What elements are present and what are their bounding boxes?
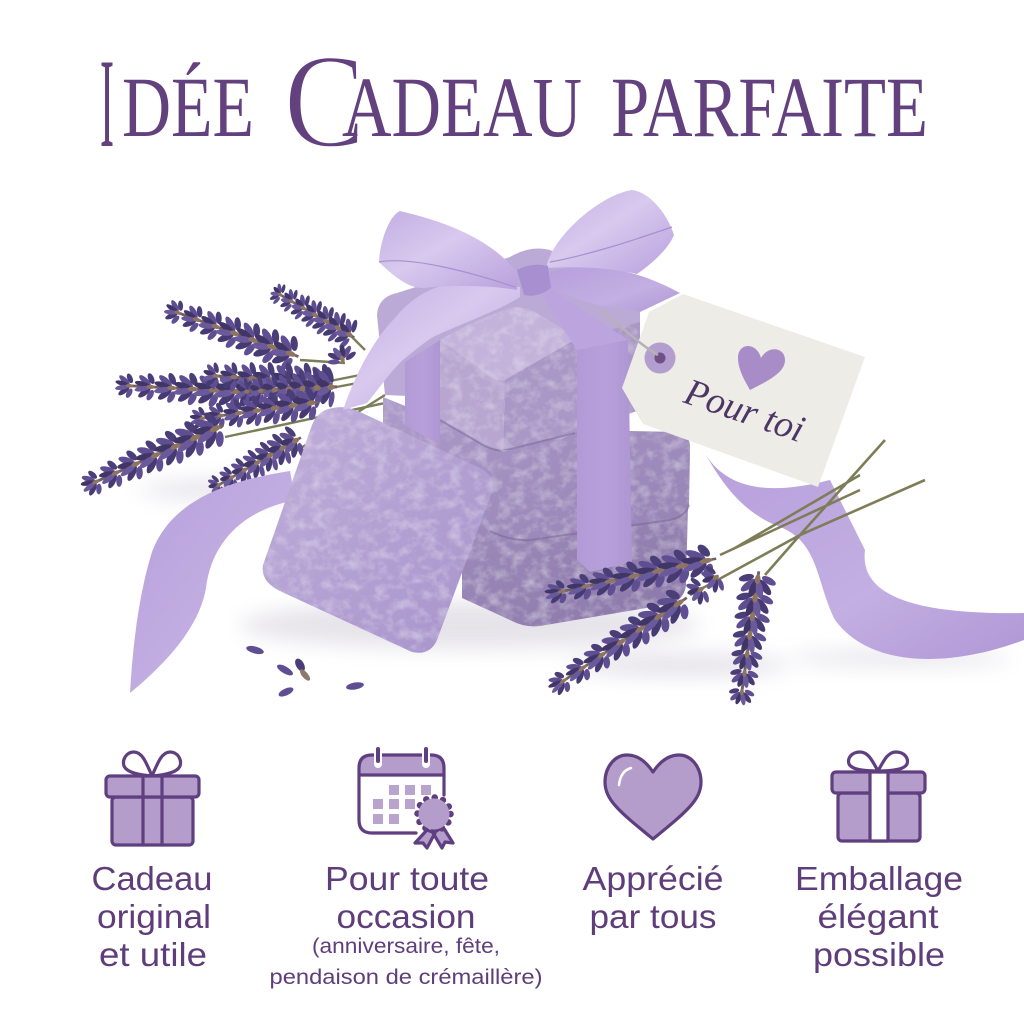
label: Apprécié par tous: Apprécié — [582, 860, 724, 897]
soap: top left face — [440, 340, 505, 450]
soap: bottom — [462, 490, 688, 626]
soap stack — [377, 249, 690, 626]
soap: back of top — [377, 249, 640, 440]
label: Pour toute occasion: Pour toute — [325, 860, 489, 897]
icon: heart — [605, 755, 701, 839]
lavender: right bouquet — [539, 440, 925, 708]
lavender: left bouquet — [74, 275, 385, 506]
fallen lavender buds — [245, 644, 364, 699]
label: Cadeau original et utile: Cadeau — [92, 860, 212, 897]
title: C — [284, 27, 365, 175]
title: PARFAITE — [611, 59, 928, 155]
soap: middle — [383, 397, 690, 540]
ribbon: left loop — [379, 211, 517, 290]
title: DÉE — [122, 59, 254, 155]
label: Pour toute occasion: occasion — [336, 898, 476, 935]
tag heart — [738, 346, 785, 390]
gift tag — [600, 294, 865, 487]
label: Pour toute occasion — [270, 860, 542, 989]
ribbon: right tail — [550, 267, 680, 312]
label: Cadeau original et utile — [92, 860, 212, 973]
tag text: Pour toi — [678, 370, 810, 451]
soap: top upper face — [440, 307, 578, 380]
title: I — [100, 34, 114, 174]
soap: top right face — [503, 322, 640, 450]
soap crease top — [440, 420, 575, 451]
label: Apprécié par tous — [582, 860, 724, 935]
tag eyelet — [644, 342, 676, 374]
label: Emballage élégant possible: élégant — [818, 898, 938, 935]
tag string — [600, 310, 658, 355]
label: Apprécié par tous: par tous — [590, 898, 716, 935]
ribbon: right loop — [547, 190, 674, 274]
label: Emballage élégant possible — [795, 860, 963, 973]
title — [100, 27, 928, 175]
ribbon: knot — [517, 265, 551, 296]
ribbon: long left tail — [343, 282, 520, 410]
tag card — [622, 294, 865, 487]
ribbon: vertical bands — [405, 290, 632, 572]
ribbon: left tail — [130, 471, 295, 693]
label: Emballage élégant possible: possible — [813, 936, 945, 973]
bow — [343, 190, 680, 410]
label: Cadeau original et utile: et utile — [99, 936, 207, 973]
label: Pour toute occasion: pendaison de crémaillère) — [270, 966, 542, 989]
label: Pour toute occasion: (anniversaire, fête, — [312, 935, 500, 958]
label: Cadeau original et utile: original — [97, 898, 211, 935]
icon: gift with white ribbon — [832, 752, 925, 841]
soap: front — [263, 407, 493, 653]
icon: gift — [106, 752, 199, 845]
label: Emballage élégant possible: Emballage — [795, 860, 963, 897]
title: ADEAU — [342, 59, 582, 155]
soap crease — [490, 505, 689, 540]
ribbon: right tail lower — [703, 450, 1024, 659]
soft shadows — [140, 480, 1010, 677]
icon: calendar with rosette — [359, 746, 453, 848]
